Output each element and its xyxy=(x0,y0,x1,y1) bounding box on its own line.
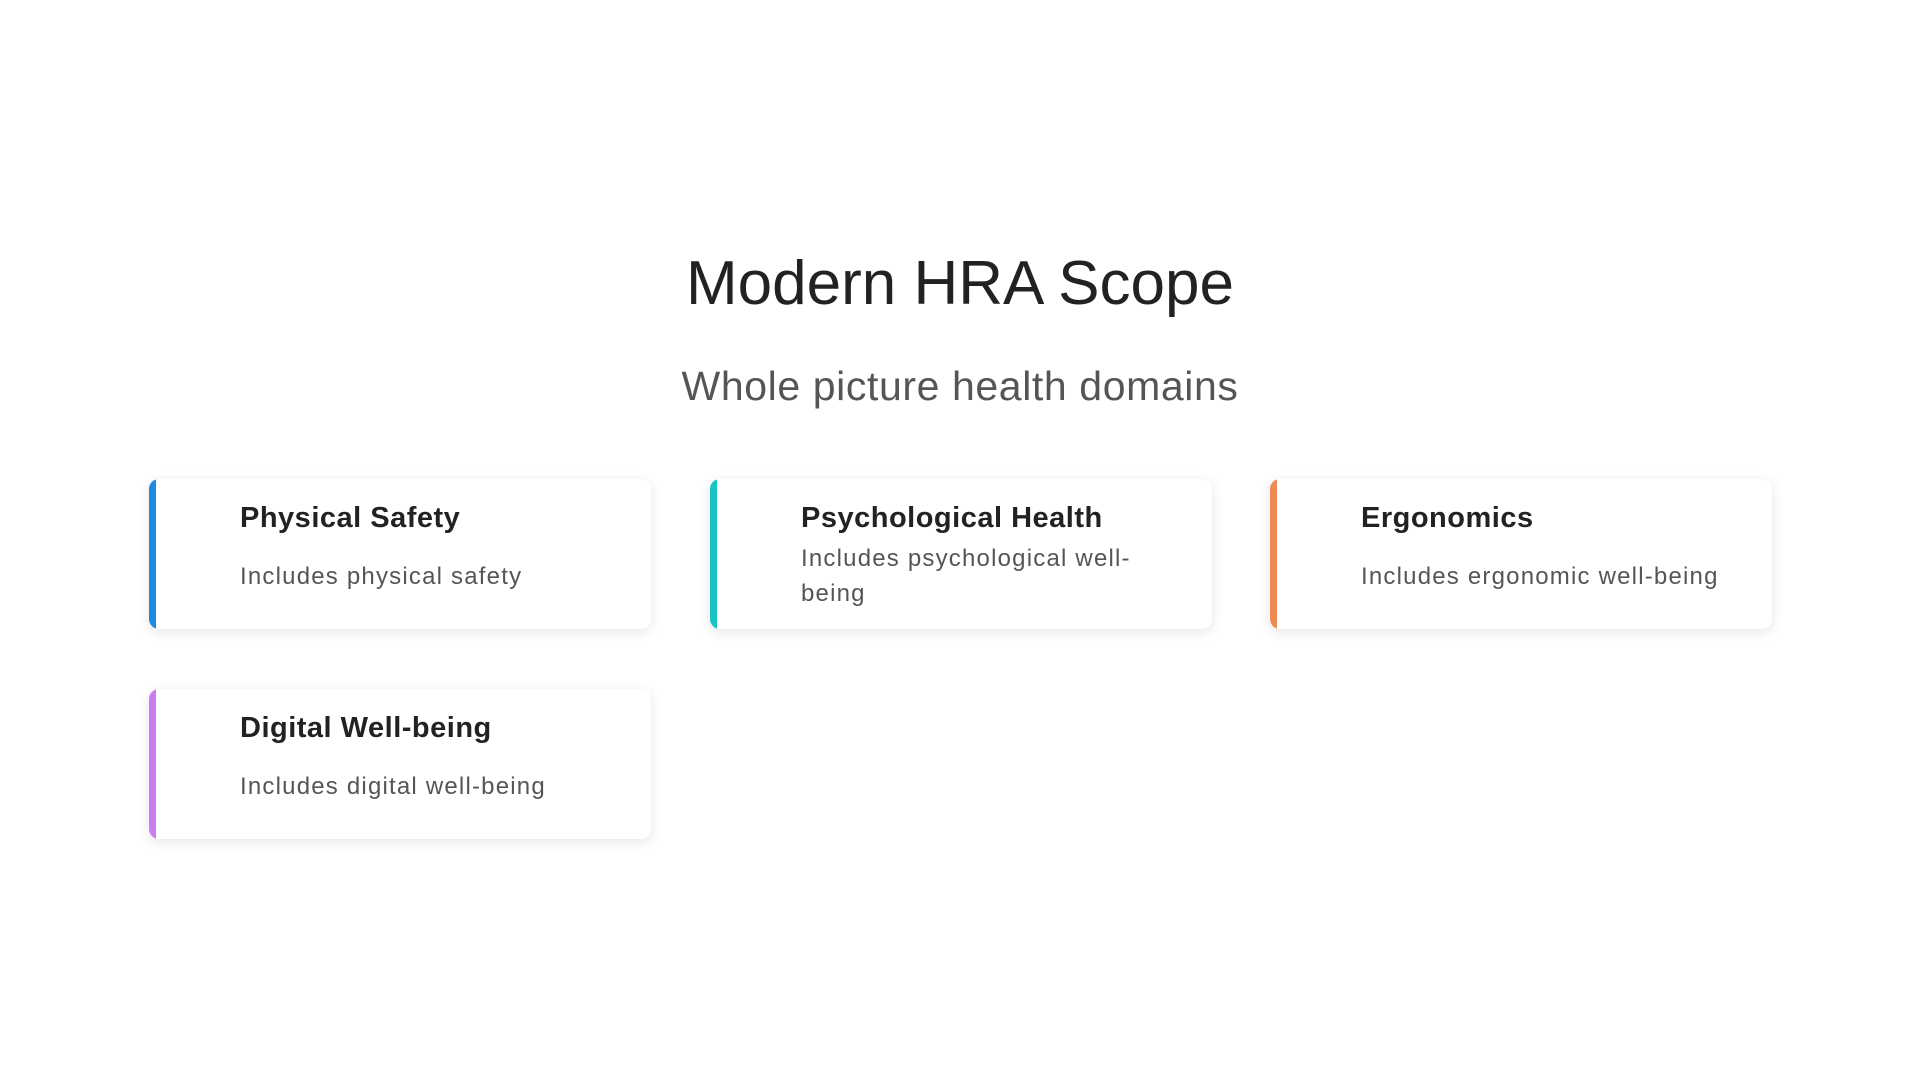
card description: Includes digital well-being xyxy=(240,772,546,800)
card description: Includes physical safety xyxy=(240,562,522,590)
card title: Psychological Health xyxy=(801,502,1103,534)
card: ergonomics xyxy=(1270,479,1772,629)
title: Modern HRA Scope xyxy=(686,249,1234,318)
card description xyxy=(801,545,1131,607)
accent bar: orange xyxy=(1270,479,1277,629)
accent bar: purple xyxy=(149,689,156,839)
card: digital well-being xyxy=(149,689,651,839)
accent bar: teal xyxy=(710,479,717,629)
card description: Includes ergonomic well-being xyxy=(1361,562,1719,590)
card title: Ergonomics xyxy=(1361,502,1534,534)
card: psychological health xyxy=(710,479,1212,629)
accent bar: blue xyxy=(149,479,156,629)
card title: Digital Well-being xyxy=(240,712,492,744)
card description: being xyxy=(801,580,866,607)
subtitle: Whole picture health domains xyxy=(682,363,1238,409)
card description: Includes psychological well- xyxy=(801,545,1131,572)
card: physical safety xyxy=(149,479,651,629)
card title: Physical Safety xyxy=(240,502,460,534)
